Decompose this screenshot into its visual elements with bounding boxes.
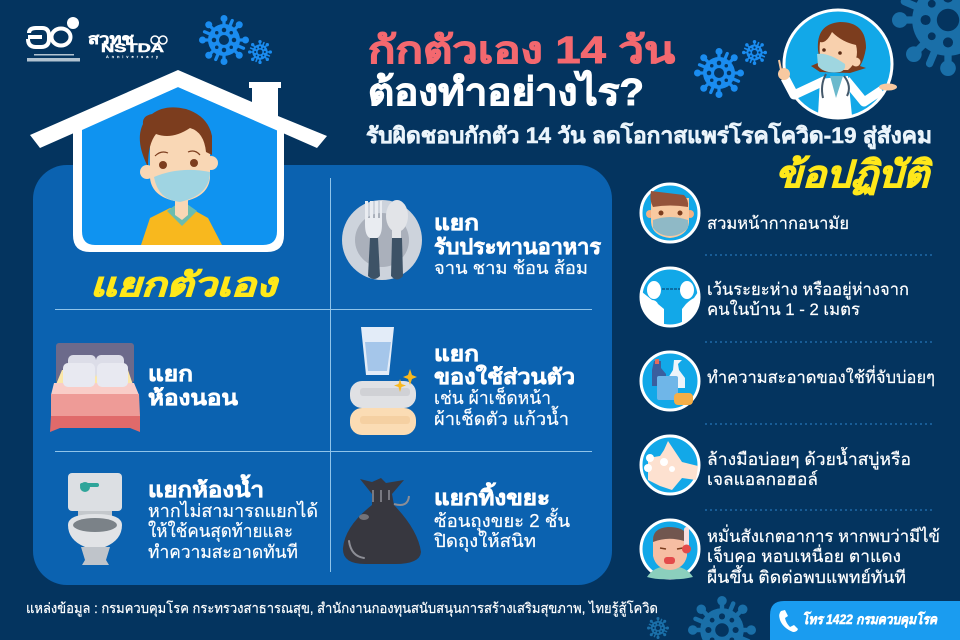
text: separate dining: จาน ชาม ช้อน ส้อม bbox=[434, 258, 588, 278]
title: กักตัวเอง 14 วัน bbox=[368, 30, 675, 72]
text: separate bathroom: ทำความสะอาดทันที bbox=[148, 542, 298, 562]
heading: practice guidelines: ข้อปฏิบัติ bbox=[775, 154, 933, 196]
panel: separate yourself bbox=[30, 70, 612, 585]
text: wash hands bbox=[707, 447, 911, 489]
icon: plate and cutlery bbox=[342, 200, 422, 280]
text: clean touched items: ทำความสะอาดของใช้ที่จับบ่อยๆ bbox=[707, 365, 935, 387]
icon: trash bag bbox=[343, 478, 421, 564]
text: sources: แหล่งข้อมูล : กรมควบคุมโรค กระทรวงสาธารณสุข, สำนักงานกองทุนสนับสนุนการสร้างเสริมสุขภาพ, ไทยรู้สู้โควิด bbox=[26, 600, 658, 617]
text: separate bedroom: ห้องนอน bbox=[148, 386, 239, 410]
text: separate personal items bbox=[434, 343, 575, 429]
text: wash hands: เจลแอลกอฮอล์ bbox=[707, 470, 818, 489]
text: keep distance: เว้นระยะห่าง หรืออยู่ห่างจาก bbox=[707, 280, 909, 300]
text: separate dining: รับประทานอาหาร bbox=[434, 236, 602, 259]
subtitle: รับผิดชอบกักตัว 14 วัน ลดโอกาสแพร่โรคโควิด-19 สู่สังคม bbox=[366, 122, 932, 150]
icon: bed bbox=[50, 343, 140, 432]
icon: keep distance bbox=[641, 268, 699, 326]
title: ต้องทำอย่างไร? bbox=[368, 70, 644, 114]
text: watch for symptoms bbox=[707, 524, 940, 587]
text: separate personal items: ของใช้ส่วนตัว bbox=[434, 364, 575, 389]
icon: doctor bbox=[778, 10, 897, 118]
text: separate garbage: ซ้อนถุงขยะ 2 ชั้น bbox=[434, 508, 570, 532]
logo: NSTDA anniversary: สวทช bbox=[88, 31, 134, 48]
text: keep distance: คนในบ้าน 1 - 2 เมตร bbox=[707, 299, 860, 319]
text: wash hands: ล้างมือบ่อยๆ ด้วยน้ำสบู่หรือ bbox=[707, 447, 911, 470]
icon: man with mask bbox=[641, 184, 699, 242]
icon: toilet bbox=[68, 473, 122, 565]
text: separate dining bbox=[434, 212, 602, 278]
text: separate bathroom: หากไม่สามารถแยกได้ bbox=[148, 500, 318, 521]
text: separate personal items: เช่น ผ้าเช็ดหน้า bbox=[434, 386, 551, 408]
text: watch for symptoms: ผื่นขึ้น ติดต่อพบแพทย์ทันที bbox=[707, 565, 906, 587]
icon: glass and towels bbox=[350, 327, 417, 435]
icons: virus top left bbox=[199, 15, 272, 65]
text: wear a mask: สวมหน้ากากอนามัย bbox=[707, 214, 849, 233]
text: separate personal items: ผ้าเช็ดตัว แก้วน้ำ bbox=[434, 406, 569, 429]
icons: virus by doctor bbox=[694, 40, 767, 98]
text: separate garbage bbox=[434, 482, 570, 552]
text: separate bathroom: แยกห้องน้ำ bbox=[148, 474, 264, 502]
icon: sick person bbox=[641, 520, 699, 579]
icon: phone bbox=[779, 610, 798, 632]
icon: washing hands bbox=[641, 436, 699, 494]
text: separate bedroom bbox=[148, 363, 239, 410]
callout: hotline: โทร 1422 กรมควบคุมโรค bbox=[802, 611, 938, 628]
heading: separate yourself: แยกตัวเอง bbox=[90, 266, 280, 303]
text: separate personal items: แยก bbox=[434, 343, 479, 366]
callout: hotline bbox=[770, 601, 960, 640]
icon: large virus top right bbox=[892, 0, 960, 76]
text: keep distance bbox=[707, 280, 909, 319]
logo: NSTDA anniversary: NSTDA bbox=[101, 41, 164, 55]
text: separate garbage: แยกทิ้งขยะ bbox=[434, 482, 550, 510]
icon: cleaning supplies bbox=[641, 352, 699, 410]
icon: house with person bbox=[30, 70, 327, 252]
text: separate bathroom bbox=[148, 474, 318, 562]
text: watch for symptoms: เจ็บคอ หอบเหนื่อย ตาแดง bbox=[707, 544, 901, 566]
text: separate bathroom: ให้ใช้คนสุดท้ายและ bbox=[148, 520, 293, 542]
text: separate dining: แยก bbox=[434, 212, 479, 235]
logo: NSTDA anniversary bbox=[88, 31, 167, 59]
title bbox=[368, 30, 675, 114]
text: separate bedroom: แยก bbox=[148, 363, 193, 386]
logo: 60 years mark bbox=[27, 17, 80, 62]
text: separate garbage: ปิดถุงให้สนิท bbox=[434, 530, 536, 552]
logo: NSTDA anniversary: Anniversary bbox=[106, 54, 158, 59]
icons: virus footer bbox=[647, 596, 756, 640]
text: watch for symptoms: หมั่นสังเกตอาการ หากพบว่ามีไข้ bbox=[707, 524, 940, 546]
